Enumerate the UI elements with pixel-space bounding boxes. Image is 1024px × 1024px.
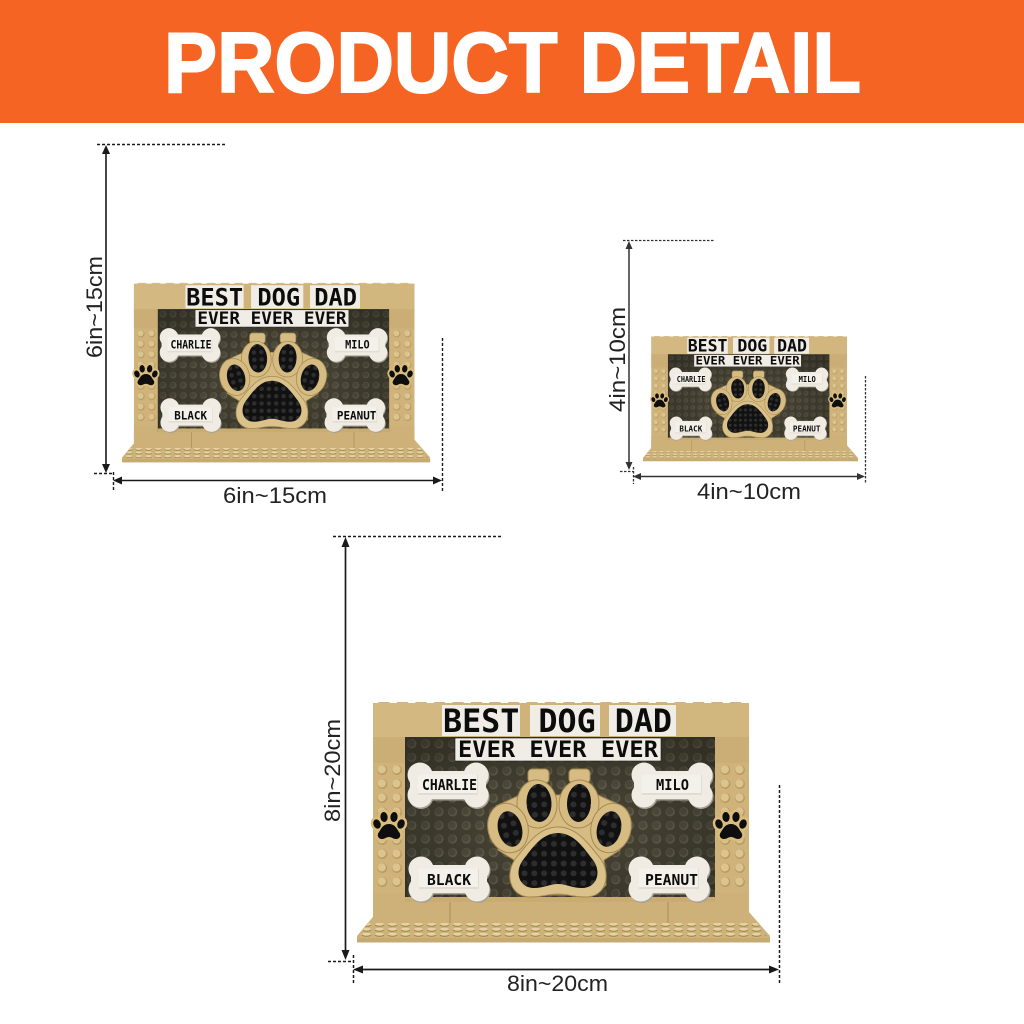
- product: 4in size: EVER EVER EVER: [696, 354, 800, 368]
- product: 4in size: BEST DOG DAD: [688, 337, 807, 356]
- label: 4in height: 4in~10cm: [605, 307, 630, 412]
- product: 4in size: [643, 336, 858, 461]
- product: 6in size: BLACK: [174, 410, 207, 423]
- dimension lines: 4in: [620, 240, 866, 484]
- label: 6in height: 6in~15cm: [82, 256, 107, 358]
- product: 4in size: BLACK: [679, 424, 703, 433]
- product: 8in size: MILO: [656, 776, 689, 794]
- product: 8in size: EVER EVER EVER: [458, 738, 659, 763]
- label: 8in width: 8in~20cm: [507, 971, 608, 996]
- title: PRODUCT DETAIL: [164, 16, 861, 111]
- product: 6in size: [122, 282, 430, 462]
- product: 6in size: PEANUT: [337, 410, 377, 423]
- dimension lines: 8in: [328, 536, 780, 985]
- product: 8in size: [357, 701, 770, 942]
- label: 8in height: 8in~20cm: [320, 719, 345, 822]
- dimension lines: 6in: [94, 144, 442, 492]
- label: 4in width: 4in~10cm: [697, 479, 801, 504]
- product: 4in size: PEANUT: [793, 424, 821, 433]
- product: 8in size: BEST DOG DAD: [443, 702, 672, 740]
- product: 6in size: CHARLIE: [171, 339, 212, 352]
- header banner: [0, 0, 1024, 123]
- product: 6in size: EVER EVER EVER: [197, 309, 347, 328]
- product: 4in size: MILO: [799, 375, 816, 384]
- product: 8in size: CHARLIE: [422, 776, 477, 794]
- label: 6in width: 6in~15cm: [223, 483, 327, 508]
- product: 8in size: PEANUT: [645, 871, 698, 889]
- product: 4in size: CHARLIE: [677, 375, 706, 384]
- product: 8in size: BLACK: [427, 871, 471, 889]
- product: 6in size: MILO: [345, 339, 370, 352]
- product: 6in size: BEST DOG DAD: [186, 283, 357, 311]
